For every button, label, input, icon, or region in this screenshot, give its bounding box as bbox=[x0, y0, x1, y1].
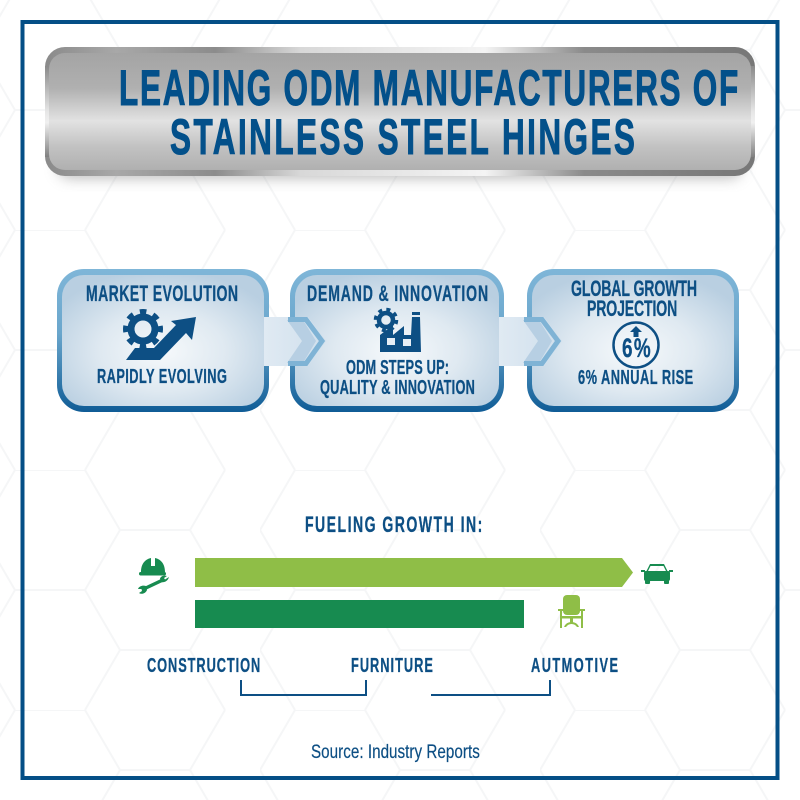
heading: fueling growth: FUELING GROWTH IN: bbox=[305, 512, 482, 537]
bracket: automotive bbox=[431, 680, 550, 695]
text: odm steps up: QUALITY & INNOVATION bbox=[320, 376, 475, 399]
label: furniture: FURNITURE bbox=[351, 654, 433, 677]
icon: chair bbox=[558, 595, 585, 628]
heading: global growth projection: GLOBAL GROWTH bbox=[571, 276, 697, 301]
panel: global growth projection bbox=[527, 269, 739, 412]
text: annual rise: 6% ANNUAL RISE bbox=[578, 366, 693, 389]
arrow: demand to growth bbox=[499, 317, 562, 366]
icon: 6 percent in circle bbox=[614, 322, 658, 368]
heading: global growth projection: PROJECTION bbox=[587, 296, 677, 321]
title bbox=[119, 60, 738, 165]
source: Source: Industry Reports bbox=[311, 740, 480, 762]
text: odm steps up: ODM STEPS UP: bbox=[346, 356, 449, 379]
panel: demand and innovation bbox=[290, 269, 504, 412]
text: odm steps up bbox=[320, 356, 475, 399]
heading: market evolution: MARKET EVOLUTION bbox=[86, 281, 238, 306]
title: STAINLESS STEEL HINGES bbox=[170, 109, 635, 165]
icon: 6 percent in circle: 6% bbox=[622, 333, 651, 363]
panel: market evolution bbox=[57, 269, 269, 412]
bar: furniture bbox=[195, 600, 524, 628]
text: rapidly evolving: RAPIDLY EVOLVING bbox=[97, 365, 227, 388]
label: construction: CONSTRUCTION bbox=[147, 654, 260, 677]
arrow: market to demand bbox=[264, 317, 326, 366]
icon: factory with gear bbox=[376, 310, 421, 352]
bracket: construction to furniture bbox=[241, 680, 366, 695]
title: LEADING ODM MANUFACTURERS OF bbox=[119, 60, 738, 116]
icon: car bbox=[641, 564, 673, 584]
bar: automotive bbox=[195, 558, 633, 587]
heading: global growth projection bbox=[571, 276, 697, 321]
heading: demand and innovation: DEMAND & INNOVATION bbox=[307, 281, 488, 306]
title plate bbox=[45, 47, 755, 178]
icon: gear and rising arrow bbox=[126, 312, 196, 360]
icon: helmet and wrench bbox=[138, 558, 169, 594]
label: automotive: AUTMOTIVE bbox=[531, 654, 618, 677]
